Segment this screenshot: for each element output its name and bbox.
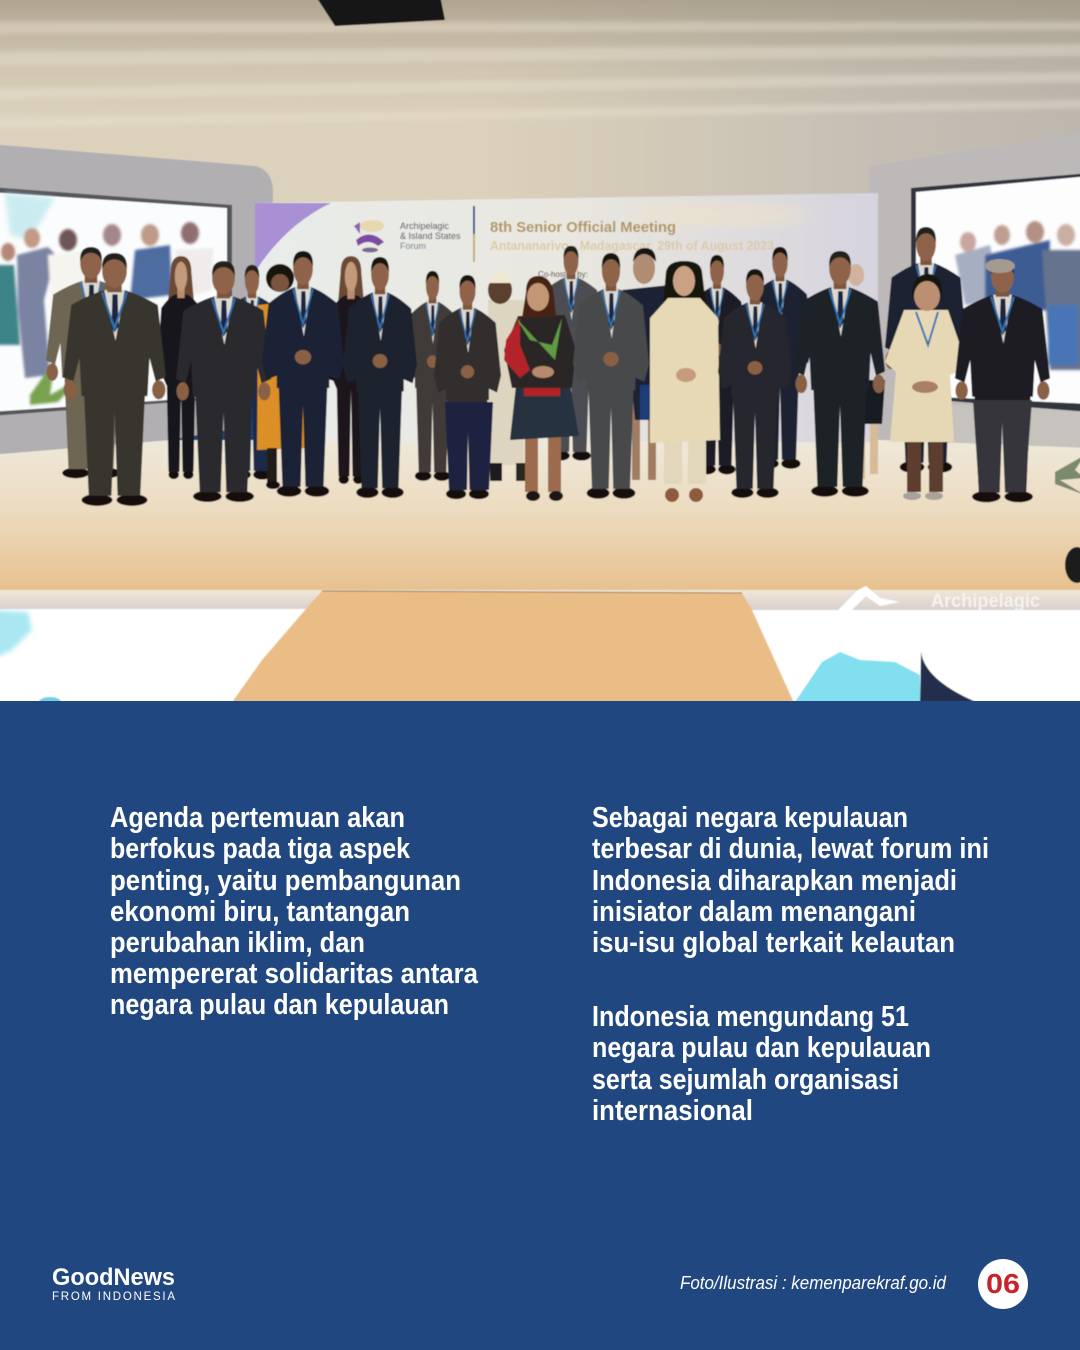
- text block: right column first paragraph: inisiator dalam menangani: [592, 896, 916, 928]
- text block: right column second paragraph: Indonesia mengundang 51: [592, 1001, 909, 1033]
- photo credit: Foto/Ilustrasi : kemenparekraf.go.id: [680, 1273, 947, 1293]
- right LED floor: [745, 610, 1080, 705]
- page number badge: [978, 1259, 1028, 1309]
- text block: left column: Agenda pertemuan akan: [110, 802, 405, 834]
- text block: left column: penting, yaitu pembangunan: [110, 865, 461, 897]
- page number badge: 06: [986, 1268, 1020, 1299]
- ceiling speaker: [315, 0, 445, 26]
- people front row: [63, 251, 1050, 506]
- text block: right column first paragraph: terbesar di dunia, lewat forum ini: [592, 833, 989, 865]
- photo: delegates group picture: [0, 0, 1080, 707]
- text block: right column first paragraph: Sebagai negara kepulauan: [592, 802, 908, 834]
- woman in cream tunic: [650, 261, 720, 502]
- backdrop divider: [473, 206, 475, 262]
- forum name: [400, 221, 461, 251]
- text block: right column second paragraph: internasional: [592, 1095, 753, 1127]
- forum name: Archipelagic: [400, 221, 450, 231]
- text block: right column second paragraph: serta sejumlah organisasi: [592, 1064, 899, 1096]
- forum name: Forum: [400, 241, 426, 251]
- forum logo: [354, 220, 384, 252]
- lower right wall: [950, 405, 1080, 447]
- text block: left column: berfokus pada tiga aspek: [110, 833, 410, 865]
- ceiling wall: [0, 0, 1080, 204]
- text block: right column second paragraph: negara pulau dan kepulauan: [592, 1032, 931, 1064]
- text block: left column: perubahan iklim, dan: [110, 927, 365, 959]
- LED logo text: [838, 586, 1040, 612]
- man in white robe and cap: [488, 272, 528, 481]
- text block: left column: mempererat solidaritas antara: [110, 958, 479, 990]
- backdrop: [255, 193, 878, 442]
- floor: [0, 440, 1080, 592]
- right screen crowd: [955, 221, 1080, 370]
- text block: left column: [110, 802, 479, 1021]
- left wall frame: [0, 144, 273, 456]
- blue text panel: [0, 701, 1080, 1350]
- back woman in navy: [622, 248, 670, 480]
- meeting title: 8th Senior Official Meeting: [490, 219, 676, 236]
- logo: GoodNews from Indonesia: FROM INDONESIA: [52, 1291, 175, 1303]
- people back row: [46, 227, 967, 489]
- left screen: [0, 187, 232, 416]
- backdrop purple corner: [255, 203, 331, 272]
- stage edge strip: [0, 590, 1080, 610]
- text block: left column: ekonomi biru, tantangan: [110, 896, 410, 928]
- right wall frame: [869, 132, 1080, 450]
- LED logo text: Archipelagic: [931, 591, 1040, 612]
- screen crowd: [0, 222, 213, 405]
- text block: right column first paragraph: isu-isu global terkait kelautan: [592, 927, 955, 959]
- grey hair: [985, 259, 1015, 273]
- orange dress with afro: [257, 264, 310, 489]
- text block: right column second paragraph: [592, 1001, 931, 1127]
- centre runway: [230, 591, 795, 705]
- back woman right, legs: [848, 264, 886, 480]
- meeting place and date: Antananarivo - Madagascar, 29th of August 2023: [490, 238, 774, 253]
- black object at right edge: [1065, 547, 1080, 583]
- navy trousers overlay: [445, 402, 493, 490]
- woman in cream dress: [885, 274, 968, 500]
- text block: right column first paragraph: [592, 802, 989, 959]
- right plant: [1055, 455, 1080, 495]
- backdrop gold smudges: [647, 205, 794, 225]
- text block: right column first paragraph: Indonesia diharapkan menjadi: [592, 865, 957, 897]
- right screen: [911, 173, 1080, 412]
- left LED floor: [0, 609, 320, 707]
- text block: left column: negara pulau dan kepulauan: [110, 989, 449, 1021]
- grey trousers overlay: [973, 400, 1032, 492]
- woman in red and batik: [504, 276, 579, 501]
- runway seam: [322, 591, 742, 593]
- logo: GoodNews from Indonesia: [52, 1264, 175, 1303]
- forum name: & Island States: [400, 231, 461, 241]
- co-host text: Co-hosted by:: [538, 270, 588, 279]
- logo: GoodNews from Indonesia: GoodNews: [52, 1264, 175, 1291]
